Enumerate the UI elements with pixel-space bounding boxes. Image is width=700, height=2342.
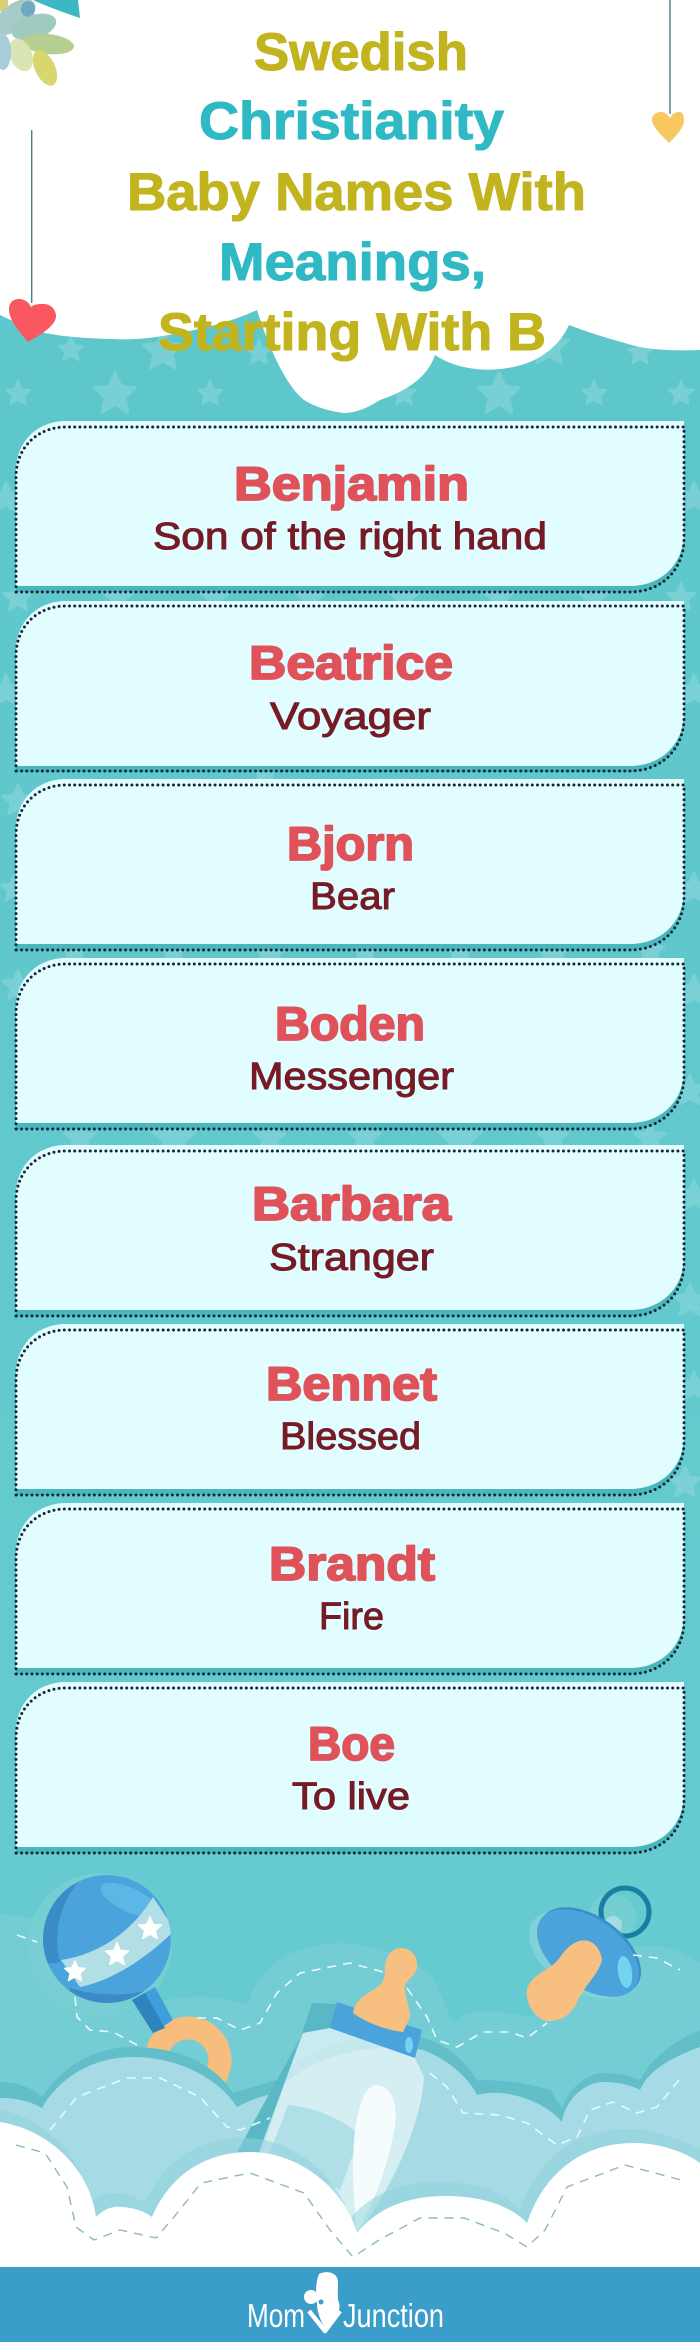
icon: yellow hanging heart [652,0,684,143]
panel: Barbara [16,1145,684,1316]
panel: Bjorn [16,779,684,950]
icon: pacifier [513,1888,657,2021]
icon: rattle [28,1870,220,2092]
panel: Boe: To live [292,1776,410,1818]
panel: Brandt [16,1503,684,1674]
top white cloud header [0,0,700,413]
panel: Boden [16,958,684,1129]
logo: MomJunction: Mom [247,2297,305,2334]
back cloud layer [0,1915,700,2200]
title: Starting With B [158,303,546,362]
panel: Bjorn: Bjorn [287,817,414,870]
title: Christianity [199,92,505,151]
icon: red hanging heart [9,130,56,342]
panel: Beatrice: Beatrice [249,636,453,689]
panel: Boden: Boden [275,997,425,1050]
panel: Benjamin: Benjamin [234,457,469,510]
panel: Bennet: Blessed [280,1416,421,1458]
title: Baby Names With [127,163,586,222]
panel: Boden: Messenger [249,1056,454,1098]
panel: Boe: Boe [308,1717,395,1770]
footer bar [0,2267,700,2342]
panel: Brandt: Brandt [269,1537,435,1590]
cloud inner shadow [0,2108,700,2253]
title: Swedish [254,23,468,82]
icon: watercolor leaves [0,0,75,89]
dashed line on white cloud [16,2145,681,2257]
corner teal triangle [33,0,80,18]
panel: Benjamin [16,421,684,592]
panel: Brandt: Fire [319,1596,384,1638]
logo: MomJunction: Junction [343,2297,444,2334]
panel: Barbara: Stranger [269,1237,434,1279]
logo icon: mother and child [304,2272,340,2331]
panel: Boe [16,1682,684,1853]
bottom white cloud [0,2122,700,2267]
front cloud dark band [0,2030,700,2200]
panel: Benjamin: Son of the right hand [153,516,547,558]
panel: Bennet [16,1324,684,1495]
dashed stitching lines [17,1935,683,2145]
front light cloud [0,2047,700,2300]
panel: Bennet: Bennet [266,1357,437,1410]
icon: baby bottle [237,1948,424,2233]
panel: Bjorn: Bear [310,876,395,918]
panel: Beatrice: Voyager [270,696,431,738]
background stars [0,326,700,1496]
panel: Barbara: Barbara [252,1177,452,1230]
title: Meanings, [219,233,486,292]
panel: Beatrice [16,601,684,772]
title [127,23,586,362]
logo: MomJunction [247,2272,444,2334]
